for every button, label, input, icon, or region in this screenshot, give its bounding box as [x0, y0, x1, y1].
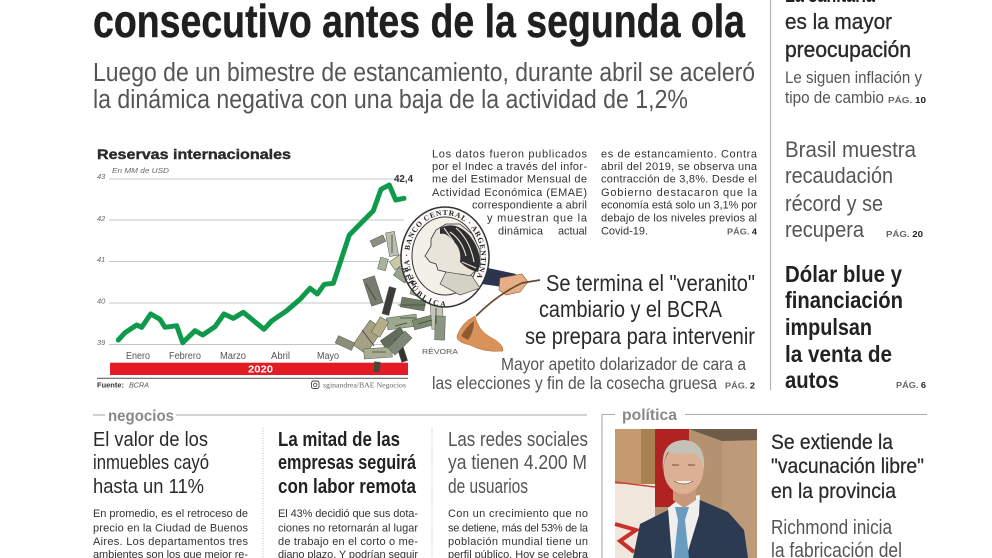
story: vacunación libre: "vacunación libre" — [771, 455, 924, 478]
chart title: Reservas internacionales — [97, 146, 291, 162]
story: vacunación libre: Se extiende la — [771, 431, 893, 454]
story: valor de los inmuebles: inmuebles cayó — [93, 451, 209, 474]
sidebar story: dólar blue: financiación — [785, 287, 903, 313]
story: labor remota: de trabajo en el corto o me- — [278, 536, 418, 548]
story: veranito cambiario: se prepara para intervenir — [525, 323, 755, 349]
source: Fuente: — [97, 380, 124, 390]
y axis labels: 43 — [97, 172, 106, 181]
article body: datos del Indec: Actividad Económica (EMAE) — [432, 187, 587, 199]
story: vacunación libre: Richmond inicia — [771, 516, 892, 539]
story: labor remota: con labor remota — [278, 475, 416, 498]
article body: datos del Indec: y muestran que la — [487, 213, 588, 225]
chart unit: En MM de USD — [112, 166, 170, 175]
photo: executive in suit — [615, 429, 757, 558]
year bar — [110, 363, 408, 376]
story: valor de los inmuebles: El valor de los — [93, 428, 208, 451]
source — [97, 380, 149, 390]
illustration: BCRA seal — [400, 206, 490, 308]
article body: datos del Indec: correspondiente a abril — [472, 200, 587, 212]
year bar: 2020 — [248, 364, 273, 376]
illustration: arm, hand and butterfly net — [422, 268, 540, 356]
section heading: política — [602, 407, 927, 558]
sidebar story: dólar blue: impulsan — [785, 314, 872, 340]
sidebar story: Brasil: recaudación — [785, 163, 893, 188]
shirt — [668, 495, 700, 558]
sidebar story: dólar blue: Dólar blue y — [785, 261, 902, 287]
article body: datos del Indec: Los datos fueron publicados — [432, 148, 588, 160]
article body: datos del Indec: contracción de 3,8%. Desde el — [601, 174, 757, 186]
sidebar story: Brasil: PÁG. 20 — [886, 229, 923, 239]
sidebar story: mayor preocupación: preocupación — [785, 37, 911, 62]
story: redes sociales: Con un crecimiento que no — [448, 508, 588, 520]
story: redes sociales: Las redes sociales — [448, 428, 588, 451]
story: valor de los inmuebles: Aires. Los departamentos tres — [93, 536, 248, 548]
y axis labels: 41 — [97, 255, 105, 264]
story: labor remota: El 43% decidió que sus dota- — [278, 508, 418, 520]
sidebar story: mayor preocupación: Le siguen inflación y — [785, 69, 923, 87]
sidebar story: dólar blue: la venta de — [785, 341, 892, 367]
article body: datos del Indec: actual — [558, 225, 587, 237]
portrait in profile — [425, 224, 480, 282]
credit with instagram icon: sginandrea/BAE Negocios — [323, 380, 406, 390]
artist signature: RÉVORA — [422, 347, 458, 356]
seal lettering: bottom arc: REPÚBLICA — [403, 267, 446, 306]
sidebar story: Brasil — [785, 137, 923, 242]
article body: datos del Indec: dinámica — [498, 225, 544, 237]
neck and face — [673, 484, 696, 508]
story: veranito cambiario: PÁG. 2 — [725, 380, 755, 390]
story: labor remota: La mitad de las — [278, 428, 400, 451]
main subheading: Luego de un bimestre de estancamiento, durante abril se aceleró — [93, 59, 755, 87]
story: veranito cambiario: Mayor apetito dolarizador de cara a — [501, 354, 746, 374]
story: redes sociales: se detiene, más del 53% de la — [448, 522, 589, 534]
article body: datos del Indec: por el Indec a través del infor- — [432, 161, 587, 173]
article body: datos del Indec: abril del 2019, se observa una — [601, 161, 758, 173]
story: redes sociales — [448, 428, 589, 558]
main subheading — [93, 59, 755, 114]
article body: datos del Indec: Gobierno destacaron que la — [601, 187, 758, 199]
story: veranito cambiario — [432, 270, 755, 393]
story: redes sociales: población mundial tiene un — [448, 536, 588, 548]
sidebar story: mayor preocupación: es la mayor — [785, 9, 892, 34]
right column divider — [770, 0, 772, 390]
article body: datos del Indec — [432, 148, 758, 237]
sidebar story: dólar blue: autos — [785, 367, 839, 393]
sidebar story: Brasil: recupera — [785, 217, 864, 242]
article body: datos del Indec: es de estancamiento. Contra — [601, 148, 758, 160]
article body: datos del Indec: PÁG. 4 — [727, 226, 757, 236]
main subheading: la dinámica negativa con una baja de la actividad de 1,2% — [93, 86, 688, 114]
y axis labels: 39 — [97, 338, 106, 347]
month labels: Abril — [271, 351, 290, 362]
y axis labels: 42 — [97, 214, 106, 223]
article body: datos del Indec: me del Estimador Mensual de — [432, 174, 587, 186]
sidebar story: dólar blue — [785, 261, 926, 393]
sidebar story: mayor preocupación: PÁG. 10 — [888, 95, 926, 105]
smile — [674, 481, 693, 484]
story: veranito cambiario: Se termina el "veranito" — [546, 270, 755, 296]
reserves line — [118, 185, 404, 343]
month labels: Febrero — [169, 351, 201, 362]
month labels: Mayo — [317, 351, 339, 362]
story: labor remota — [278, 428, 418, 558]
y axis labels: 40 — [97, 296, 106, 306]
column separators — [263, 428, 432, 558]
article body: datos del Indec: Covid-19. — [601, 225, 648, 237]
story: valor de los inmuebles: En promedio, es el retroceso de — [93, 508, 248, 520]
story: redes sociales: de usuarios — [448, 475, 528, 498]
month labels: Enero — [126, 351, 150, 362]
seal lettering: top arc: DE LA · BANCO CENTRAL · ARGENTINA — [404, 210, 486, 287]
story: valor de los inmuebles — [93, 428, 248, 558]
story: valor de los inmuebles: precio en la Ciudad de Buenos — [93, 522, 248, 534]
section heading: política: política — [622, 407, 677, 424]
hair — [663, 440, 704, 470]
section heading: negocios: negocios — [108, 408, 174, 425]
sidebar story: Brasil: Brasil muestra — [785, 137, 916, 162]
y axis labels — [97, 172, 106, 347]
sidebar story: mayor preocupación — [785, 0, 926, 107]
line chart: reservas internacionales — [97, 146, 413, 390]
article body: datos del Indec: debajo de los niveles previos al — [601, 213, 757, 225]
story: labor remota: empresas seguirá — [278, 451, 416, 474]
story: redes sociales: ya tienen 4.200 M — [448, 451, 587, 474]
article body: datos del Indec: economía está solo un 3,1% por — [601, 200, 757, 212]
grid lines — [109, 179, 404, 344]
suit — [633, 500, 748, 558]
month labels: Marzo — [220, 351, 246, 362]
illustration: falling dollar bills — [335, 231, 445, 372]
story: vacunación libre: en la provincia — [771, 480, 896, 503]
tie — [674, 507, 689, 558]
sidebar story: dólar blue: PÁG. 6 — [896, 380, 926, 390]
story: veranito cambiario: cambiario y el BCRA — [539, 296, 722, 322]
month labels — [126, 351, 339, 362]
sidebar story: mayor preocupación: tipo de cambio — [785, 89, 884, 107]
story: vacunación libre — [771, 431, 924, 558]
last value label: 42,4 — [394, 173, 413, 185]
source: BCRA — [129, 380, 149, 390]
story: labor remota: ciones no retornarán al lugar — [278, 522, 418, 534]
sidebar story: Brasil: récord y se — [785, 191, 883, 216]
story: valor de los inmuebles: hasta un 11% — [93, 475, 204, 498]
story: veranito cambiario: las elecciones y fin de la cosecha gruesa — [432, 373, 717, 393]
